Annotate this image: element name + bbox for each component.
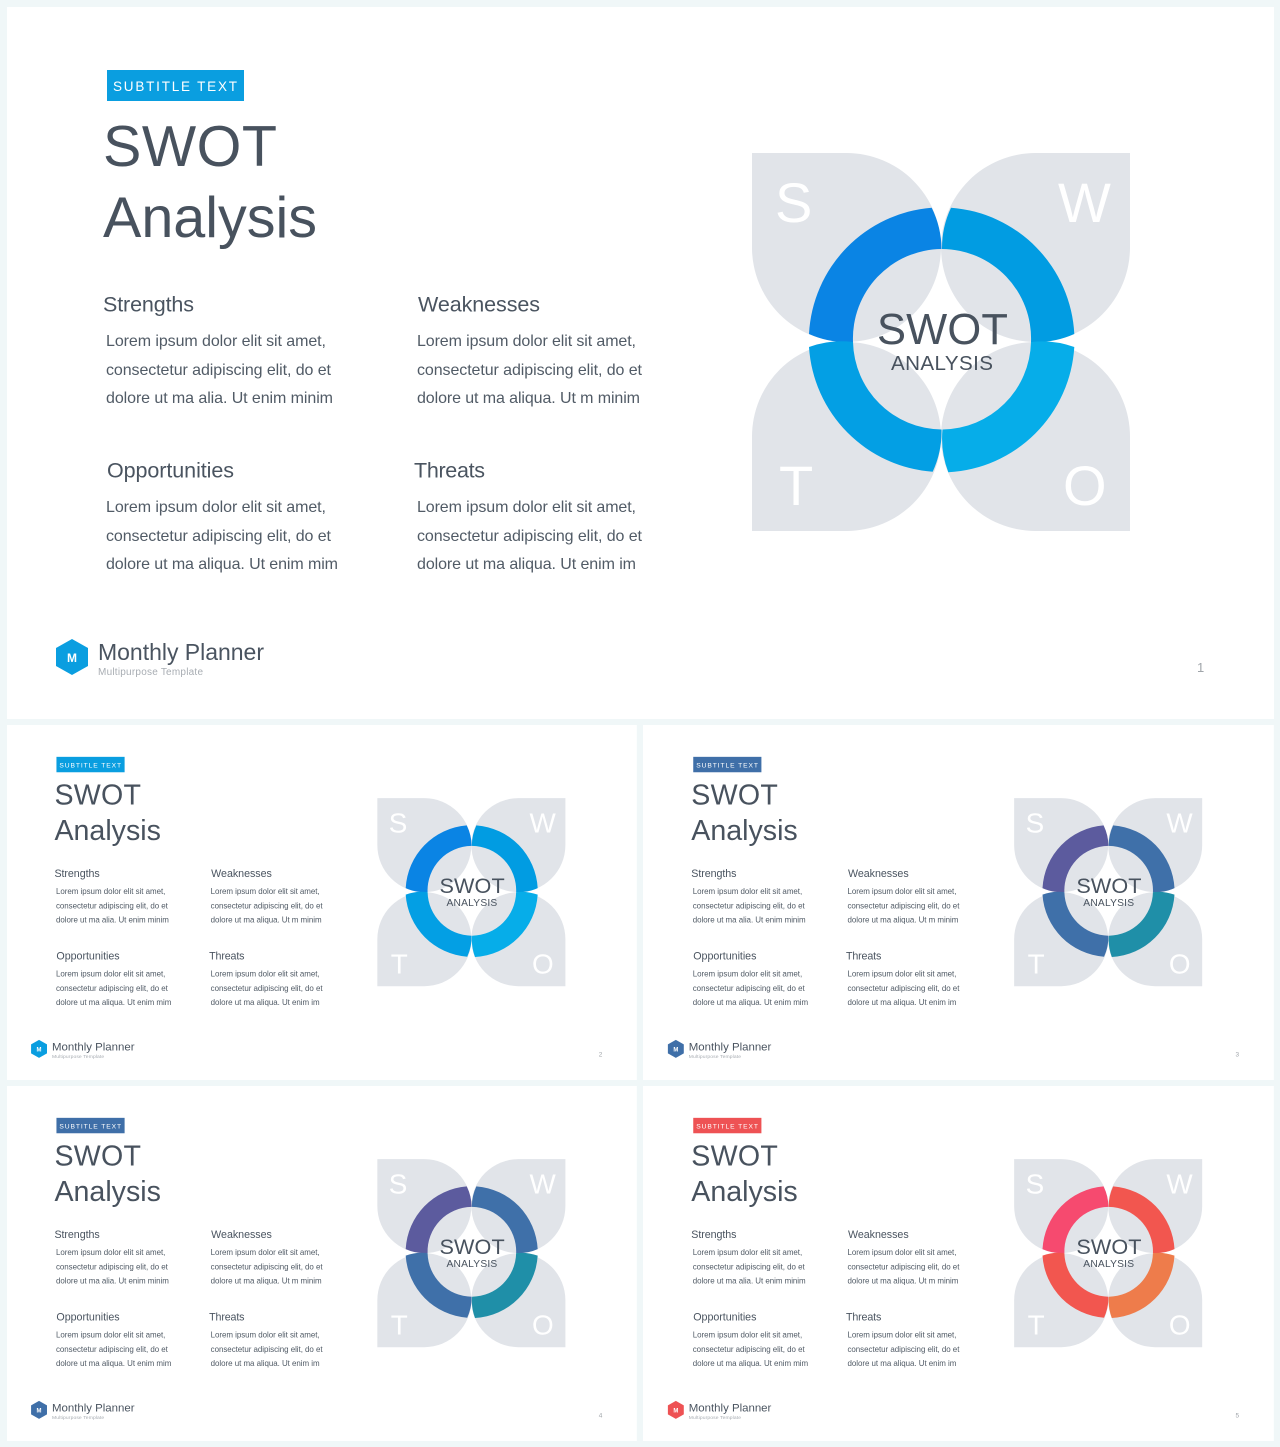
text block: strengths (691, 868, 806, 925)
text block: weaknesses (211, 1229, 323, 1286)
footer logo: M (67, 651, 77, 665)
footer logo: Monthly Planner (52, 1041, 135, 1053)
text block: weaknesses: Weaknesses (211, 868, 272, 880)
SWOT diagram: O (532, 1309, 554, 1340)
title: SWOT (691, 1141, 778, 1173)
footer logo: Monthly Planner (52, 1402, 135, 1414)
text block: opportunities: Opportunities (56, 1312, 120, 1324)
footer logo: M (673, 1408, 678, 1414)
page number: 1 (1197, 660, 1204, 675)
footer logo: Multipurpose Template (689, 1054, 741, 1060)
text block: threats: Lorem ipsum dolor elit sit amet, (847, 1331, 956, 1340)
text block: threats: Threats (209, 951, 245, 963)
text block: strengths (103, 292, 333, 407)
text block: weaknesses: dolore ut ma aliqua. Ut m minim (847, 916, 959, 925)
text block: weaknesses (417, 292, 643, 407)
SWOT diagram: ANALYSIS (1083, 898, 1134, 909)
panel: main slide, blue (7, 7, 1274, 719)
title: SWOT (54, 780, 141, 812)
text block: weaknesses: Lorem ipsum dolor elit sit amet, (211, 1248, 320, 1257)
text block: weaknesses (847, 1229, 960, 1286)
title: Analysis (54, 1176, 161, 1208)
text block: strengths: consectetur adipiscing elit, do et (56, 902, 169, 911)
footer logo: Monthly Planner (98, 639, 264, 665)
SWOT diagram (1014, 1159, 1202, 1347)
SWOT diagram: SWOT (1076, 1234, 1141, 1259)
text block: opportunities: dolore ut ma aliqua. Ut enim mim (106, 556, 338, 573)
text block: opportunities: Lorem ipsum dolor elit sit amet, (56, 1331, 165, 1340)
text block: opportunities: dolore ut ma aliqua. Ut enim mim (693, 998, 809, 1007)
text block: strengths: dolore ut ma alia. Ut enim minim (693, 916, 806, 925)
text block: strengths: consectetur adipiscing elit, do et (56, 1263, 169, 1272)
text block: opportunities: Lorem ipsum dolor elit sit amet, (693, 970, 802, 979)
SWOT diagram: O (532, 948, 554, 979)
SWOT diagram: T (779, 454, 813, 517)
text block: strengths: Lorem ipsum dolor elit sit amet, (56, 887, 165, 896)
subtitle badge: SUBTITLE TEXT (696, 762, 758, 769)
text block: opportunities: Opportunities (693, 1312, 756, 1324)
text block: threats (209, 1312, 323, 1368)
subtitle badge (56, 757, 125, 772)
SWOT diagram: ANALYSIS (446, 898, 497, 909)
text block: threats: Threats (846, 1312, 881, 1324)
text block: threats: Lorem ipsum dolor elit sit amet, (847, 970, 956, 979)
SWOT diagram: T (1028, 1309, 1045, 1340)
subtitle badge (107, 70, 244, 101)
text block: threats (414, 458, 643, 573)
SWOT diagram (752, 153, 1130, 531)
SWOT diagram: O (1063, 454, 1107, 517)
title: Analysis (103, 186, 317, 250)
text block: threats: consectetur adipiscing elit, do et (847, 984, 960, 993)
SWOT diagram: W (1166, 1168, 1193, 1199)
subtitle badge: SUBTITLE TEXT (59, 762, 121, 769)
text block: threats: dolore ut ma aliqua. Ut enim im (211, 1359, 320, 1368)
SWOT diagram: S (1026, 807, 1044, 838)
text block: strengths (691, 1229, 806, 1286)
footer logo (56, 639, 264, 678)
text block: strengths: Lorem ipsum dolor elit sit amet, (693, 1248, 802, 1257)
title (691, 1141, 798, 1208)
text block: strengths: dolore ut ma alia. Ut enim minim (56, 1277, 169, 1286)
text block: strengths: Lorem ipsum dolor elit sit amet, (56, 1248, 165, 1257)
text block: weaknesses: Weaknesses (418, 292, 540, 316)
text block: weaknesses: Weaknesses (848, 1229, 909, 1241)
footer logo: Multipurpose Template (98, 667, 203, 678)
text block: opportunities: consectetur adipiscing elit, do et (56, 984, 169, 993)
text block: weaknesses: consectetur adipiscing elit, do et (847, 1263, 960, 1272)
footer logo: Monthly Planner (689, 1402, 772, 1414)
SWOT diagram: SWOT (1076, 873, 1141, 898)
footer logo: Multipurpose Template (52, 1054, 104, 1060)
text block: threats: Lorem ipsum dolor elit sit amet, (417, 499, 636, 516)
text block: opportunities: Lorem ipsum dolor elit sit amet, (56, 970, 165, 979)
text block: strengths: dolore ut ma alia. Ut enim minim (106, 390, 333, 407)
text block: strengths: consectetur adipiscing elit, do et (693, 1263, 805, 1272)
text block: threats: Lorem ipsum dolor elit sit amet, (211, 970, 320, 979)
SWOT diagram: ANALYSIS (891, 352, 993, 375)
SWOT diagram: T (391, 1309, 408, 1340)
text block: strengths (54, 868, 169, 925)
page number: 4 (599, 1412, 603, 1419)
SWOT diagram: W (1166, 807, 1193, 838)
SWOT diagram: SWOT (440, 1234, 505, 1259)
SWOT diagram: S (775, 171, 812, 234)
subtitle badge (693, 757, 761, 772)
footer logo: Monthly Planner (689, 1041, 772, 1053)
text block: weaknesses: consectetur adipiscing elit, do et (847, 902, 960, 911)
text block: weaknesses: Weaknesses (848, 868, 909, 880)
text block: opportunities (693, 951, 809, 1007)
title: SWOT (54, 1141, 141, 1173)
text block: weaknesses: Lorem ipsum dolor elit sit amet, (847, 887, 956, 896)
SWOT diagram: SWOT (877, 306, 1008, 354)
title: SWOT (691, 780, 778, 812)
SWOT diagram: SWOT (440, 873, 505, 898)
text block: weaknesses: dolore ut ma aliqua. Ut m minim (211, 916, 322, 925)
text block: weaknesses: Lorem ipsum dolor elit sit amet, (211, 887, 320, 896)
SWOT diagram: S (389, 807, 407, 838)
text block: weaknesses: dolore ut ma aliqua. Ut m minim (417, 390, 640, 407)
text block: weaknesses (847, 868, 960, 925)
footer logo: Multipurpose Template (52, 1415, 104, 1421)
footer logo: Multipurpose Template (689, 1415, 741, 1421)
title: SWOT (103, 115, 277, 179)
SWOT diagram (1014, 798, 1202, 986)
text block: strengths: dolore ut ma alia. Ut enim minim (693, 1277, 806, 1286)
text block: strengths: consectetur adipiscing elit, do et (106, 362, 332, 379)
text block: opportunities: consectetur adipiscing elit, do et (56, 1345, 169, 1354)
text block: opportunities: Lorem ipsum dolor elit sit amet, (106, 499, 326, 516)
text block: weaknesses: consectetur adipiscing elit, do et (211, 902, 323, 911)
text block: opportunities: dolore ut ma aliqua. Ut enim mim (56, 998, 172, 1007)
title (54, 780, 161, 847)
text block: threats: dolore ut ma aliqua. Ut enim im (417, 556, 636, 573)
SWOT diagram: S (389, 1168, 407, 1199)
subtitle badge: SUBTITLE TEXT (696, 1123, 758, 1130)
text block: threats (209, 951, 323, 1007)
SWOT diagram: T (391, 948, 408, 979)
text block: weaknesses (211, 868, 323, 925)
text block: opportunities: dolore ut ma aliqua. Ut enim mim (693, 1359, 809, 1368)
text block: threats (846, 951, 960, 1007)
subtitle badge: SUBTITLE TEXT (113, 79, 237, 94)
text block: opportunities: consectetur adipiscing elit, do et (693, 1345, 805, 1354)
text block: opportunities (56, 1312, 172, 1368)
text block: strengths: Strengths (54, 1229, 100, 1241)
text block: threats (846, 1312, 960, 1368)
panel: slide 5, coral (643, 1086, 1274, 1441)
title (691, 780, 798, 847)
text block: threats: consectetur adipiscing elit, do et (211, 1345, 323, 1354)
footer logo: M (673, 1047, 678, 1053)
text block: strengths: dolore ut ma alia. Ut enim minim (56, 916, 169, 925)
subtitle badge: SUBTITLE TEXT (59, 1123, 121, 1130)
SWOT diagram: ANALYSIS (1083, 1259, 1134, 1270)
text block: opportunities (106, 458, 338, 573)
text block: threats: consectetur adipiscing elit, do et (417, 528, 643, 545)
text block: weaknesses: dolore ut ma aliqua. Ut m minim (211, 1277, 322, 1286)
text block: weaknesses: Lorem ipsum dolor elit sit amet, (847, 1248, 956, 1257)
page number: 2 (599, 1051, 603, 1058)
text block: threats: dolore ut ma aliqua. Ut enim im (847, 998, 957, 1007)
text block: opportunities: dolore ut ma aliqua. Ut enim mim (56, 1359, 172, 1368)
text block: strengths: Lorem ipsum dolor elit sit amet, (693, 887, 802, 896)
SWOT diagram: W (1058, 171, 1111, 234)
text block: threats: Threats (846, 951, 881, 963)
text block: opportunities: consectetur adipiscing elit, do et (693, 984, 805, 993)
text block: opportunities: consectetur adipiscing elit, do et (106, 528, 332, 545)
SWOT diagram: O (1169, 948, 1191, 979)
panel: slide 2, blue (7, 725, 637, 1080)
title: Analysis (54, 815, 161, 847)
footer logo (668, 1040, 772, 1060)
text block: weaknesses: Lorem ipsum dolor elit sit amet, (417, 333, 636, 350)
text block: weaknesses: Weaknesses (211, 1229, 272, 1241)
text block: strengths: consectetur adipiscing elit, do et (693, 902, 805, 911)
text block: strengths: Strengths (691, 868, 737, 880)
text block: threats: consectetur adipiscing elit, do et (847, 1345, 960, 1354)
SWOT diagram (377, 1159, 565, 1347)
text block: strengths (54, 1229, 169, 1286)
SWOT diagram: W (530, 807, 557, 838)
SWOT diagram: S (1026, 1168, 1044, 1199)
SWOT diagram (377, 798, 565, 986)
SWOT diagram: T (1028, 948, 1045, 979)
panel: slide 4, indigo (7, 1086, 637, 1441)
SWOT diagram: W (530, 1168, 557, 1199)
panel: slide 3, indigo (643, 725, 1274, 1080)
title: Analysis (691, 1176, 798, 1208)
SWOT diagram: O (1169, 1309, 1191, 1340)
text block: threats: dolore ut ma aliqua. Ut enim im (211, 998, 320, 1007)
subtitle badge (56, 1118, 125, 1133)
text block: opportunities: Opportunities (693, 951, 756, 963)
text block: strengths: Strengths (54, 868, 100, 880)
page number: 5 (1236, 1412, 1240, 1419)
footer logo (31, 1040, 135, 1060)
text block: threats: Lorem ipsum dolor elit sit amet, (211, 1331, 320, 1340)
footer logo: M (37, 1408, 42, 1414)
title (54, 1141, 161, 1208)
text block: weaknesses: consectetur adipiscing elit, do et (211, 1263, 323, 1272)
text block: weaknesses: consectetur adipiscing elit, do et (417, 362, 643, 379)
footer logo (668, 1401, 772, 1421)
text block: threats: dolore ut ma aliqua. Ut enim im (847, 1359, 957, 1368)
text block: strengths: Strengths (691, 1229, 737, 1241)
text block: opportunities (693, 1312, 809, 1368)
text block: threats: Threats (414, 458, 485, 482)
text block: strengths: Lorem ipsum dolor elit sit amet, (106, 333, 326, 350)
title (103, 115, 317, 250)
text block: strengths: Strengths (103, 292, 194, 316)
page number: 3 (1236, 1051, 1240, 1058)
text block: weaknesses: dolore ut ma aliqua. Ut m minim (847, 1277, 959, 1286)
text block: opportunities: Opportunities (107, 458, 234, 482)
text block: threats: consectetur adipiscing elit, do et (211, 984, 323, 993)
footer logo (31, 1401, 135, 1421)
SWOT diagram: ANALYSIS (446, 1259, 497, 1270)
subtitle badge (693, 1118, 761, 1133)
footer logo: M (37, 1047, 42, 1053)
title: Analysis (691, 815, 798, 847)
text block: opportunities (56, 951, 172, 1007)
text block: threats: Threats (209, 1312, 245, 1324)
text block: opportunities: Lorem ipsum dolor elit sit amet, (693, 1331, 802, 1340)
text block: opportunities: Opportunities (56, 951, 120, 963)
